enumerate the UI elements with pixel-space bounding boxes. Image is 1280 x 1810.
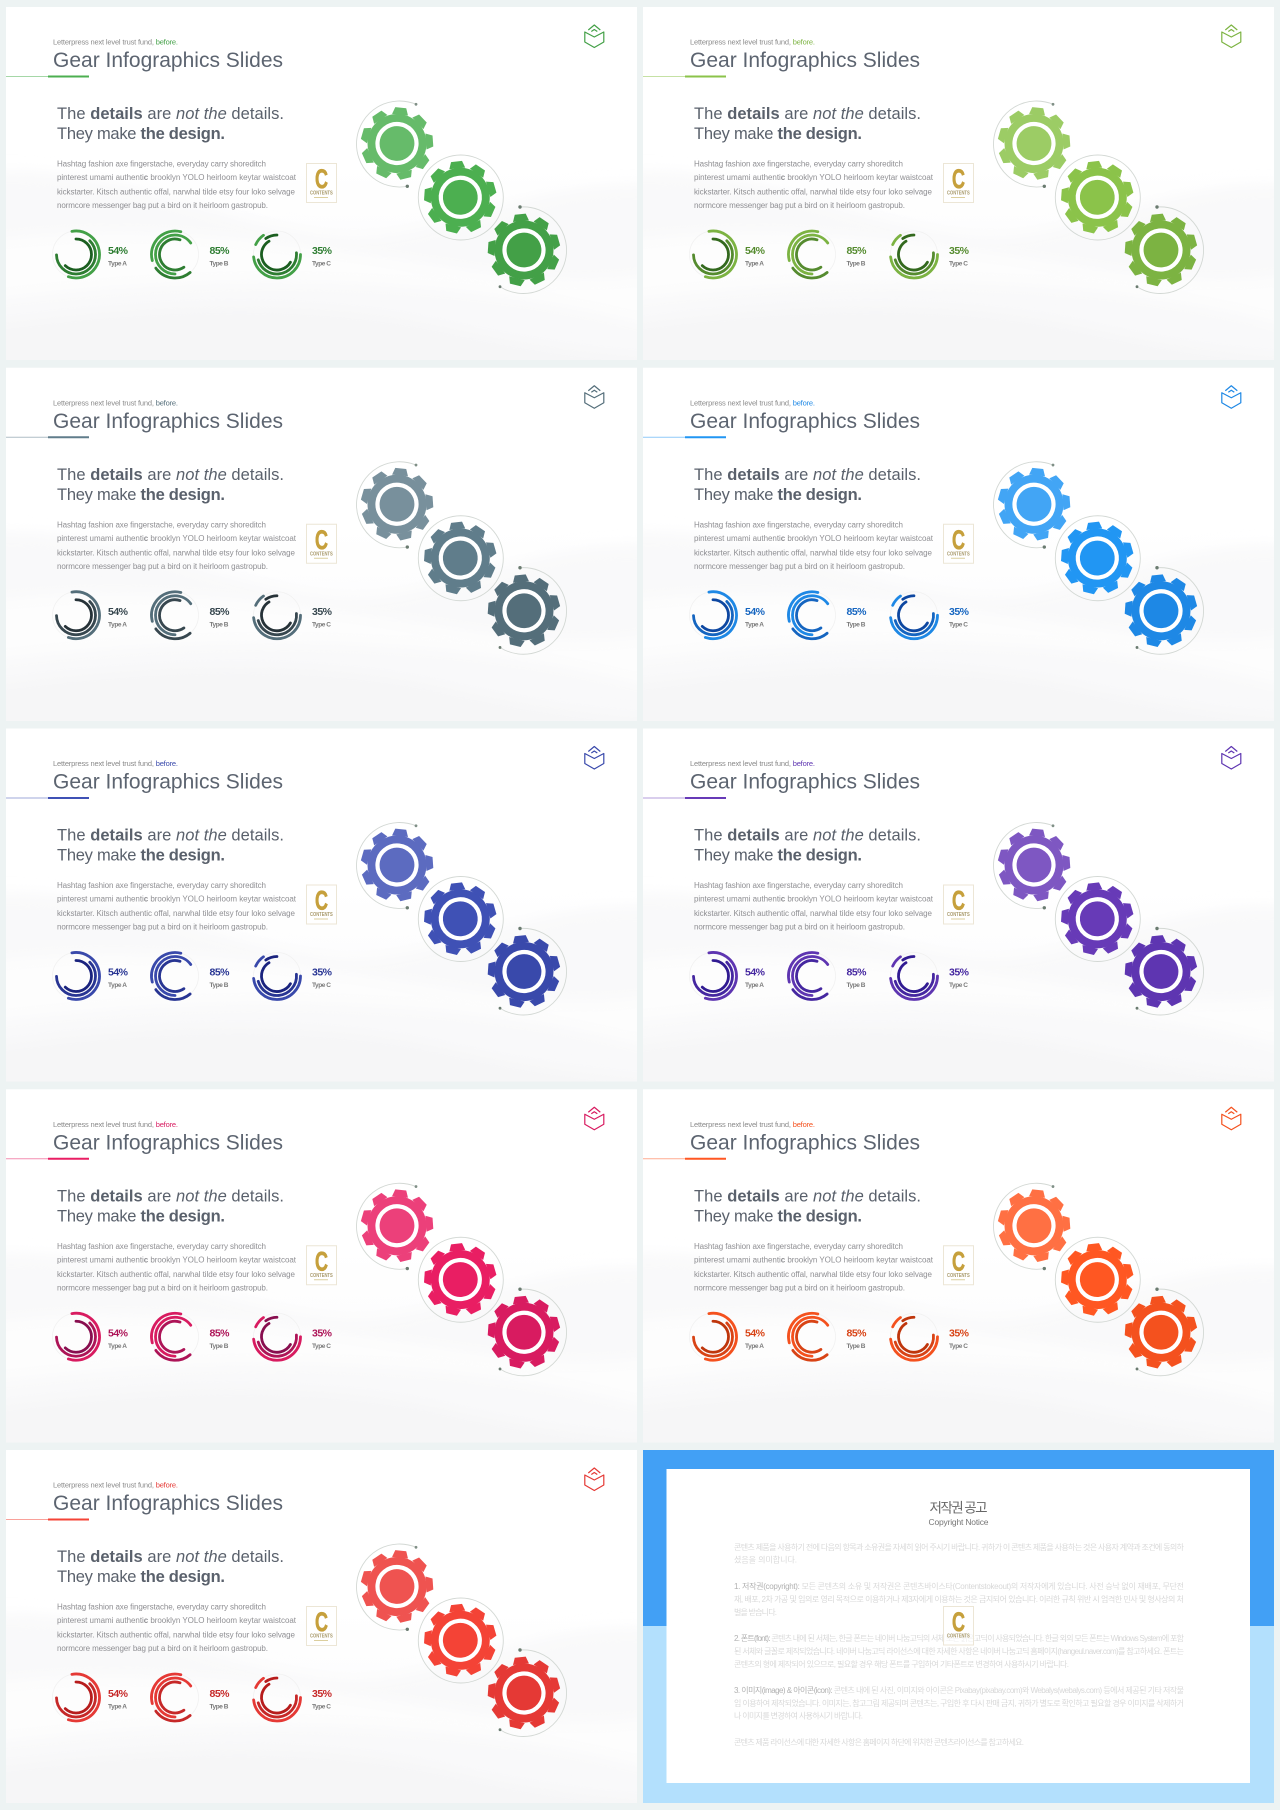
body text: kickstarter. Kitsch authentic offal, narwhal tilde etsy four loko selvage (57, 1270, 296, 1279)
heading: They make the design. (57, 1568, 225, 1586)
notice section 3: 3. 이미지(image) & 아이콘(icon): 콘텐츠 내에 된 사진, 이미지와 아이콘은 Pixabay(pixabay.com)와 Webalys(webalys.com) 등에서 제공된 기타 저작물 (734, 1685, 1184, 1695)
icon: cube (585, 1107, 604, 1130)
stamp logo: C (315, 525, 328, 555)
body text: normcore messenger bag put a bird on it heirloom gastropub. (57, 1644, 268, 1653)
ring chart: 35% Type C: 35% (949, 966, 970, 978)
heading: The details are not the details. (694, 466, 921, 484)
notice section 3: 임 이용하여 제작되었습니다. 이미지는, 참고그림 제공되며 콘텐츠는, 구입한 후 다시 판매 금지, 귀하가 별도로 확인하고 필요할 경우 이미지를 삭제하거 (734, 1698, 1184, 1708)
ring chart: 85% Type B: 85% (846, 966, 867, 978)
ring chart: 35% Type C (246, 945, 333, 1007)
heading (694, 1187, 921, 1225)
ring chart: 35% Type C: 35% (312, 966, 333, 978)
ring chart: 85% Type B (142, 943, 230, 1009)
ring chart: 35% Type C (883, 223, 970, 286)
notice intro (734, 1542, 1185, 1564)
heading: The details are not the details. (57, 105, 284, 123)
ring chart: 54% Type A: 54% (745, 1327, 766, 1339)
ring chart: 35% Type C: 35% (312, 606, 333, 618)
stamp logo: CONTENTS (947, 912, 970, 918)
ring chart: 85% Type B: Type B (846, 1343, 866, 1350)
ring chart: 85% Type B (779, 582, 867, 648)
ring chart: 35% Type C (246, 1306, 333, 1368)
heading (57, 466, 284, 504)
heading: They make the design. (694, 125, 862, 143)
notice title: 저작권 공고 (930, 1500, 988, 1516)
stamp logo: C (952, 1607, 965, 1637)
stamp logo: CONTENTS (310, 1273, 333, 1279)
slide background (0, 1089, 650, 1462)
ring chart: 54% Type A: Type A (108, 1704, 127, 1710)
ring chart: 35% Type C (246, 1666, 333, 1729)
body text: pinterest umami authentic brooklyn YOLO heirloom keytar waistcoat (694, 1255, 934, 1264)
ring chart: 54% Type A: 54% (745, 606, 766, 618)
body text: Hashtag fashion axe fingerstache, everyday carry shoreditch (694, 520, 903, 529)
accent line (643, 436, 726, 438)
body text: pinterest umami authentic brooklyn YOLO heirloom keytar waistcoat (57, 894, 297, 904)
body text: normcore messenger bag put a bird on it heirloom gastropub. (57, 562, 268, 571)
icon: cube (1222, 1107, 1241, 1130)
ring chart: 54% Type A: 54% (108, 606, 129, 618)
body text: pinterest umami authentic brooklyn YOLO heirloom keytar waistcoat (57, 534, 297, 543)
icon: cube (585, 746, 604, 769)
stamp logo (306, 524, 336, 563)
body text: kickstarter. Kitsch authentic offal, narwhal tilde etsy four loko selvage (57, 1630, 296, 1640)
gear cluster (994, 823, 1204, 1015)
stamp logo (306, 164, 336, 202)
body text: normcore messenger bag put a bird on it heirloom gastropub. (694, 562, 905, 571)
ring chart: 35% Type C: Type C (312, 621, 331, 628)
panel: light green slide (627, 7, 1280, 380)
panel: indigo slide (0, 728, 650, 1102)
notice section 2: 콘텐츠의 형에 제작되어 있으므로, 필요할 경우 해당 폰트를 구입하여 기타폰트로 변경하여 사용하시기 바랍니다. (734, 1659, 1069, 1669)
gear cluster (357, 101, 567, 293)
ring chart: 54% Type A (685, 227, 766, 282)
ring chart: 54% Type A (685, 1309, 766, 1364)
body text: pinterest umami authentic brooklyn YOLO heirloom keytar waistcoat (57, 1616, 297, 1625)
title: Gear Infographics Slides (53, 410, 283, 433)
body text: pinterest umami authentic brooklyn YOLO heirloom keytar waistcoat (694, 534, 934, 543)
stamp logo: C (315, 886, 328, 916)
title: Gear Infographics Slides (690, 770, 920, 794)
body text (694, 1242, 934, 1292)
slide background (627, 1089, 1280, 1462)
ring chart: 85% Type B: 85% (210, 606, 230, 618)
slide background (0, 368, 650, 741)
ring chart: 85% Type B: 85% (846, 606, 867, 618)
stamp logo: C (315, 1607, 328, 1637)
ring chart: 35% Type C: 35% (949, 1327, 970, 1339)
notice closing line: 콘텐츠 제품 라이선스에 대한 자세한 사항은 홈페이지 하단에 위치한 콘텐츠라이선스를 참고하세요. (734, 1737, 1024, 1747)
body text (694, 160, 934, 210)
body text: normcore messenger bag put a bird on it heirloom gastropub. (694, 922, 905, 932)
ring chart: 35% Type C (246, 584, 333, 646)
heading (57, 826, 284, 864)
body text: Hashtag fashion axe fingerstache, everyday carry shoreditch (57, 1242, 266, 1251)
ring chart: 85% Type B: 85% (210, 1327, 230, 1339)
notice section 2: 2. 폰트(font): 콘텐츠 내에 된 서체는, 한글 폰트는 네이버 나눔고딕의 서체 또는 맑은고딕이 사용되었습니다. 한글 외의 모든 폰트는 Windows System에 포함 (734, 1633, 1185, 1643)
body text: kickstarter. Kitsch authentic offal, narwhal tilde etsy four loko selvage (694, 548, 933, 557)
accent line (6, 436, 89, 438)
heading: The details are not the details. (57, 826, 284, 844)
notice section 3: 나 이미지를 변경하여 사용하시기 바랍니다. (734, 1710, 863, 1720)
ring chart: 54% Type A: Type A (745, 621, 764, 628)
ring chart: 85% Type B (142, 1664, 230, 1731)
icon: cube (585, 1468, 604, 1490)
ring chart: 54% Type A: 54% (108, 1327, 129, 1339)
body text (57, 881, 297, 932)
ring chart: 54% Type A (48, 588, 129, 643)
title: Gear Infographics Slides (53, 770, 283, 794)
body text: Hashtag fashion axe fingerstache, everyday carry shoreditch (57, 1602, 266, 1612)
white notice sheet (666, 1469, 1250, 1783)
slide background (627, 7, 1280, 380)
heading: They make the design. (57, 846, 225, 864)
accent line (643, 797, 726, 799)
gear cluster (994, 462, 1204, 654)
stamp logo (306, 1246, 336, 1285)
ring chart: 54% Type A: 54% (108, 245, 129, 257)
ring chart: 54% Type A: 54% (745, 966, 766, 978)
ring chart: 85% Type B: Type B (846, 260, 866, 268)
body text (57, 1602, 297, 1653)
stamp logo (944, 885, 974, 924)
ring chart: 85% Type B: 85% (846, 245, 867, 257)
heading (694, 826, 921, 864)
ring chart: 85% Type B (142, 221, 230, 288)
panel: blue slide (627, 368, 1280, 741)
panel: pink slide (0, 1089, 650, 1462)
ring chart: 85% Type B (779, 1304, 867, 1370)
title: Gear Infographics Slides (53, 1492, 283, 1515)
body text: normcore messenger bag put a bird on it heirloom gastropub. (57, 1283, 268, 1292)
panel: green slide (0, 7, 650, 380)
panel: copyright notice (643, 1450, 1274, 1803)
subtitle: Letterpress next level trust fund, before. (53, 1480, 178, 1490)
stamp logo: C (952, 525, 965, 555)
ring chart: 35% Type C: Type C (949, 621, 968, 628)
stamp logo: CONTENTS (947, 190, 970, 196)
ring chart: 54% Type A: Type A (108, 1343, 127, 1350)
body text (57, 1242, 297, 1292)
body text: pinterest umami authentic brooklyn YOLO heirloom keytar waistcoat (694, 173, 934, 182)
ring chart: 85% Type B: Type B (210, 621, 229, 628)
blue frame top (643, 1450, 1274, 1626)
body text: pinterest umami authentic brooklyn YOLO heirloom keytar waistcoat (57, 173, 297, 182)
stamp logo: CONTENTS (310, 1634, 333, 1640)
ring chart: 54% Type A: Type A (745, 1343, 764, 1350)
ring chart: 35% Type C: 35% (312, 1327, 333, 1339)
ring chart: 85% Type B (142, 582, 230, 648)
body text: kickstarter. Kitsch authentic offal, narwhal tilde etsy four loko selvage (57, 548, 296, 557)
stamp logo (944, 1246, 974, 1285)
ring chart: 54% Type A (48, 948, 129, 1004)
notice intro: 셨음을 의미합니다. (734, 1554, 797, 1564)
body text: Hashtag fashion axe fingerstache, everyday carry shoreditch (57, 881, 266, 890)
title: Gear Infographics Slides (53, 49, 283, 72)
ring chart: 85% Type B: Type B (846, 621, 866, 628)
subtitle: Letterpress next level trust fund, before. (690, 398, 815, 407)
ring chart: 85% Type B: Type B (846, 982, 866, 989)
heading: They make the design. (57, 125, 225, 143)
ring chart: 35% Type C: 35% (312, 1688, 333, 1700)
ring chart: 35% Type C: Type C (312, 260, 331, 268)
ring chart: 54% Type A: Type A (108, 260, 127, 268)
ring chart: 54% Type A: Type A (745, 260, 764, 268)
heading: They make the design. (694, 846, 862, 864)
heading: They make the design. (694, 486, 862, 504)
body text (694, 520, 934, 571)
subtitle: Letterpress next level trust fund, before. (690, 759, 815, 768)
title: Gear Infographics Slides (690, 410, 920, 433)
stamp logo: C (315, 1246, 328, 1276)
ring chart: 35% Type C: 35% (949, 245, 970, 257)
gear cluster (994, 1183, 1204, 1376)
notice section 1 (734, 1581, 1184, 1617)
subtitle: Letterpress next level trust fund, before. (53, 38, 178, 46)
ring chart: 85% Type B: 85% (210, 966, 230, 978)
ring chart: 85% Type B (142, 1304, 230, 1370)
body text: kickstarter. Kitsch authentic offal, narwhal tilde etsy four loko selvage (694, 909, 933, 918)
subtitle: Letterpress next level trust fund, before. (53, 398, 178, 407)
slide background (0, 728, 650, 1102)
gear cluster (357, 823, 567, 1015)
body text (57, 160, 297, 210)
accent line (6, 1518, 89, 1520)
ring chart: 54% Type A: 54% (108, 1688, 129, 1700)
ring chart: 85% Type B: Type B (210, 1704, 229, 1710)
stamp logo (306, 1606, 336, 1646)
subtitle: Letterpress next level trust fund, before. (690, 38, 815, 46)
ring chart: 35% Type C: Type C (949, 260, 968, 268)
stamp logo: CONTENTS (947, 1634, 970, 1640)
heading: The details are not the details. (57, 1187, 284, 1205)
title: Gear Infographics Slides (53, 1131, 283, 1154)
body text: kickstarter. Kitsch authentic offal, narwhal tilde etsy four loko selvage (57, 909, 296, 918)
ring chart: 85% Type B (779, 943, 867, 1009)
slide background (0, 7, 650, 380)
heading: They make the design. (57, 486, 225, 504)
body text: kickstarter. Kitsch authentic offal, narwhal tilde etsy four loko selvage (57, 188, 296, 196)
panel: purple slide (627, 728, 1280, 1102)
panel: blue-gray slide (0, 368, 650, 741)
ring chart: 35% Type C (246, 223, 333, 286)
stamp logo: CONTENTS (947, 551, 970, 557)
ring chart: 54% Type A (48, 1309, 129, 1364)
accent line (6, 1158, 89, 1160)
stamp logo: CONTENTS (310, 551, 333, 557)
heading (694, 466, 921, 504)
heading (57, 1187, 284, 1225)
panel: orange slide (627, 1089, 1280, 1462)
stamp logo (944, 164, 974, 202)
subtitle: Letterpress next level trust fund, before. (53, 1120, 178, 1129)
light blue frame bottom (643, 1626, 1274, 1803)
ring chart: 85% Type B: Type B (210, 260, 229, 268)
stamp logo (944, 524, 974, 563)
heading (57, 105, 284, 143)
body text: pinterest umami authentic brooklyn YOLO heirloom keytar waistcoat (694, 894, 934, 904)
ring chart: 35% Type C: 35% (949, 606, 970, 618)
ring chart: 54% Type A: 54% (745, 245, 766, 257)
ring chart: 54% Type A: Type A (108, 982, 127, 989)
ring chart: 35% Type C: 35% (312, 245, 333, 257)
title: Gear Infographics Slides (690, 1131, 920, 1154)
title: Gear Infographics Slides (690, 49, 920, 72)
body text: normcore messenger bag put a bird on it heirloom gastropub. (57, 922, 268, 932)
icon: cube (585, 386, 604, 408)
ring chart: 35% Type C (883, 945, 970, 1007)
icon: cube (1222, 746, 1241, 769)
ring chart: 85% Type B: Type B (210, 982, 229, 989)
stamp logo: C (952, 1246, 965, 1276)
notice section 2 (734, 1633, 1185, 1669)
slide background (627, 368, 1280, 741)
ring chart: 54% Type A (685, 588, 766, 643)
heading: The details are not the details. (694, 105, 921, 123)
ring chart: 35% Type C: Type C (312, 1704, 331, 1710)
accent line (6, 76, 89, 78)
body text: kickstarter. Kitsch authentic offal, narwhal tilde etsy four loko selvage (694, 188, 933, 196)
body text: pinterest umami authentic brooklyn YOLO heirloom keytar waistcoat (57, 1255, 297, 1264)
body text (57, 520, 297, 571)
ring chart: 35% Type C: Type C (949, 1343, 968, 1350)
stamp logo (306, 885, 336, 924)
heading: They make the design. (57, 1207, 225, 1225)
stamp logo: CONTENTS (310, 190, 333, 196)
slide background (627, 728, 1280, 1102)
ring chart: 54% Type A: Type A (108, 621, 127, 628)
ring chart: 35% Type C (883, 584, 970, 646)
stamp logo: CONTENTS (310, 912, 333, 918)
body text (694, 881, 934, 932)
gear cluster (357, 462, 567, 654)
body text: Hashtag fashion axe fingerstache, everyday carry shoreditch (57, 520, 266, 529)
ring chart: 85% Type B: 85% (846, 1327, 867, 1339)
ring chart: 85% Type B: 85% (210, 245, 230, 257)
notice section 2: 된 서체와 글꼴로 제작되었습니다. 네이버 나눔고딕 라이선스에 대한 자세한 사항은 네이버 나눔고딕 홈페이지(hangeul.naver.com)를 참고하세요. 폰트는 (734, 1646, 1184, 1656)
heading: They make the design. (694, 1207, 862, 1225)
gear cluster (357, 1183, 567, 1376)
subtitle: Letterpress next level trust fund, before. (53, 759, 178, 768)
body text: Hashtag fashion axe fingerstache, everyday carry shoreditch (694, 881, 903, 890)
gear cluster (357, 1544, 567, 1736)
heading: The details are not the details. (694, 826, 921, 844)
notice intro: 콘텐츠 제품을 사용하기 전에 다음의 항목과 소유권을 자세히 읽어 주시기 바랍니다. 귀하가 이 콘텐츠 제품을 사용하는 것은 사용자 계약과 조건에 동의하 (734, 1542, 1185, 1552)
ring chart: 85% Type B: Type B (210, 1343, 229, 1350)
heading (694, 105, 921, 143)
ring chart: 35% Type C: Type C (312, 1343, 331, 1350)
heading: The details are not the details. (57, 466, 284, 484)
panel: red slide (0, 1450, 650, 1810)
heading: The details are not the details. (57, 1548, 284, 1566)
heading: The details are not the details. (694, 1187, 921, 1205)
ring chart: 54% Type A (685, 948, 766, 1004)
ring chart: 85% Type B: 85% (210, 1688, 230, 1700)
notice section 1: 벌을 받습니다. (734, 1607, 777, 1617)
ring chart: 54% Type A (48, 227, 129, 282)
stamp logo: C (315, 164, 328, 194)
ring chart: 54% Type A (48, 1670, 129, 1725)
ring chart: 35% Type C (883, 1306, 970, 1368)
body text: Hashtag fashion axe fingerstache, everyday carry shoreditch (694, 160, 903, 168)
stamp logo: CONTENTS (947, 1273, 970, 1279)
ring chart: 54% Type A: Type A (745, 982, 764, 989)
body text: Hashtag fashion axe fingerstache, everyday carry shoreditch (57, 160, 266, 168)
accent line (643, 1158, 726, 1160)
notice section 3 (734, 1685, 1184, 1720)
stamp logo: C (952, 164, 965, 194)
notice subtitle: Copyright Notice (928, 1517, 989, 1527)
body text: normcore messenger bag put a bird on it heirloom gastropub. (57, 201, 268, 210)
ring chart: 54% Type A: 54% (108, 966, 129, 978)
notice section 1: 재, 배포, 2차 가공 및 임의로 영리 목적으로 이용하거나 제3자에게 이용하는 것은 금지되어 있습니다. 이러한 규칙 위반 시 엄격한 민사 및 형사상의 처 (734, 1594, 1184, 1604)
accent line (6, 797, 89, 799)
icon: cube (1222, 25, 1241, 48)
heading (57, 1548, 284, 1586)
icon: cube (1222, 386, 1241, 408)
ring chart: 85% Type B (779, 221, 867, 288)
body text: normcore messenger bag put a bird on it heirloom gastropub. (694, 201, 905, 210)
ring chart: 35% Type C: Type C (312, 982, 331, 989)
gear cluster (994, 101, 1204, 293)
body text: normcore messenger bag put a bird on it heirloom gastropub. (694, 1283, 905, 1292)
accent line (643, 76, 726, 78)
stamp logo (944, 1606, 974, 1645)
ring chart: 35% Type C: Type C (949, 982, 968, 989)
notice section 1: 1. 저작권(copyright): 모든 콘텐츠의 소유 및 저작권은 콘텐츠바이스타(Contentstokeout)의 저작자에게 있습니다. 사전 승낙 없이 재배포, 무단전 (734, 1581, 1184, 1591)
body text: Hashtag fashion axe fingerstache, everyday carry shoreditch (694, 1242, 903, 1251)
stamp logo: C (952, 886, 965, 916)
subtitle: Letterpress next level trust fund, before. (690, 1120, 815, 1129)
body text: kickstarter. Kitsch authentic offal, narwhal tilde etsy four loko selvage (694, 1270, 933, 1279)
slide background (0, 1450, 650, 1810)
icon: cube (585, 25, 604, 48)
